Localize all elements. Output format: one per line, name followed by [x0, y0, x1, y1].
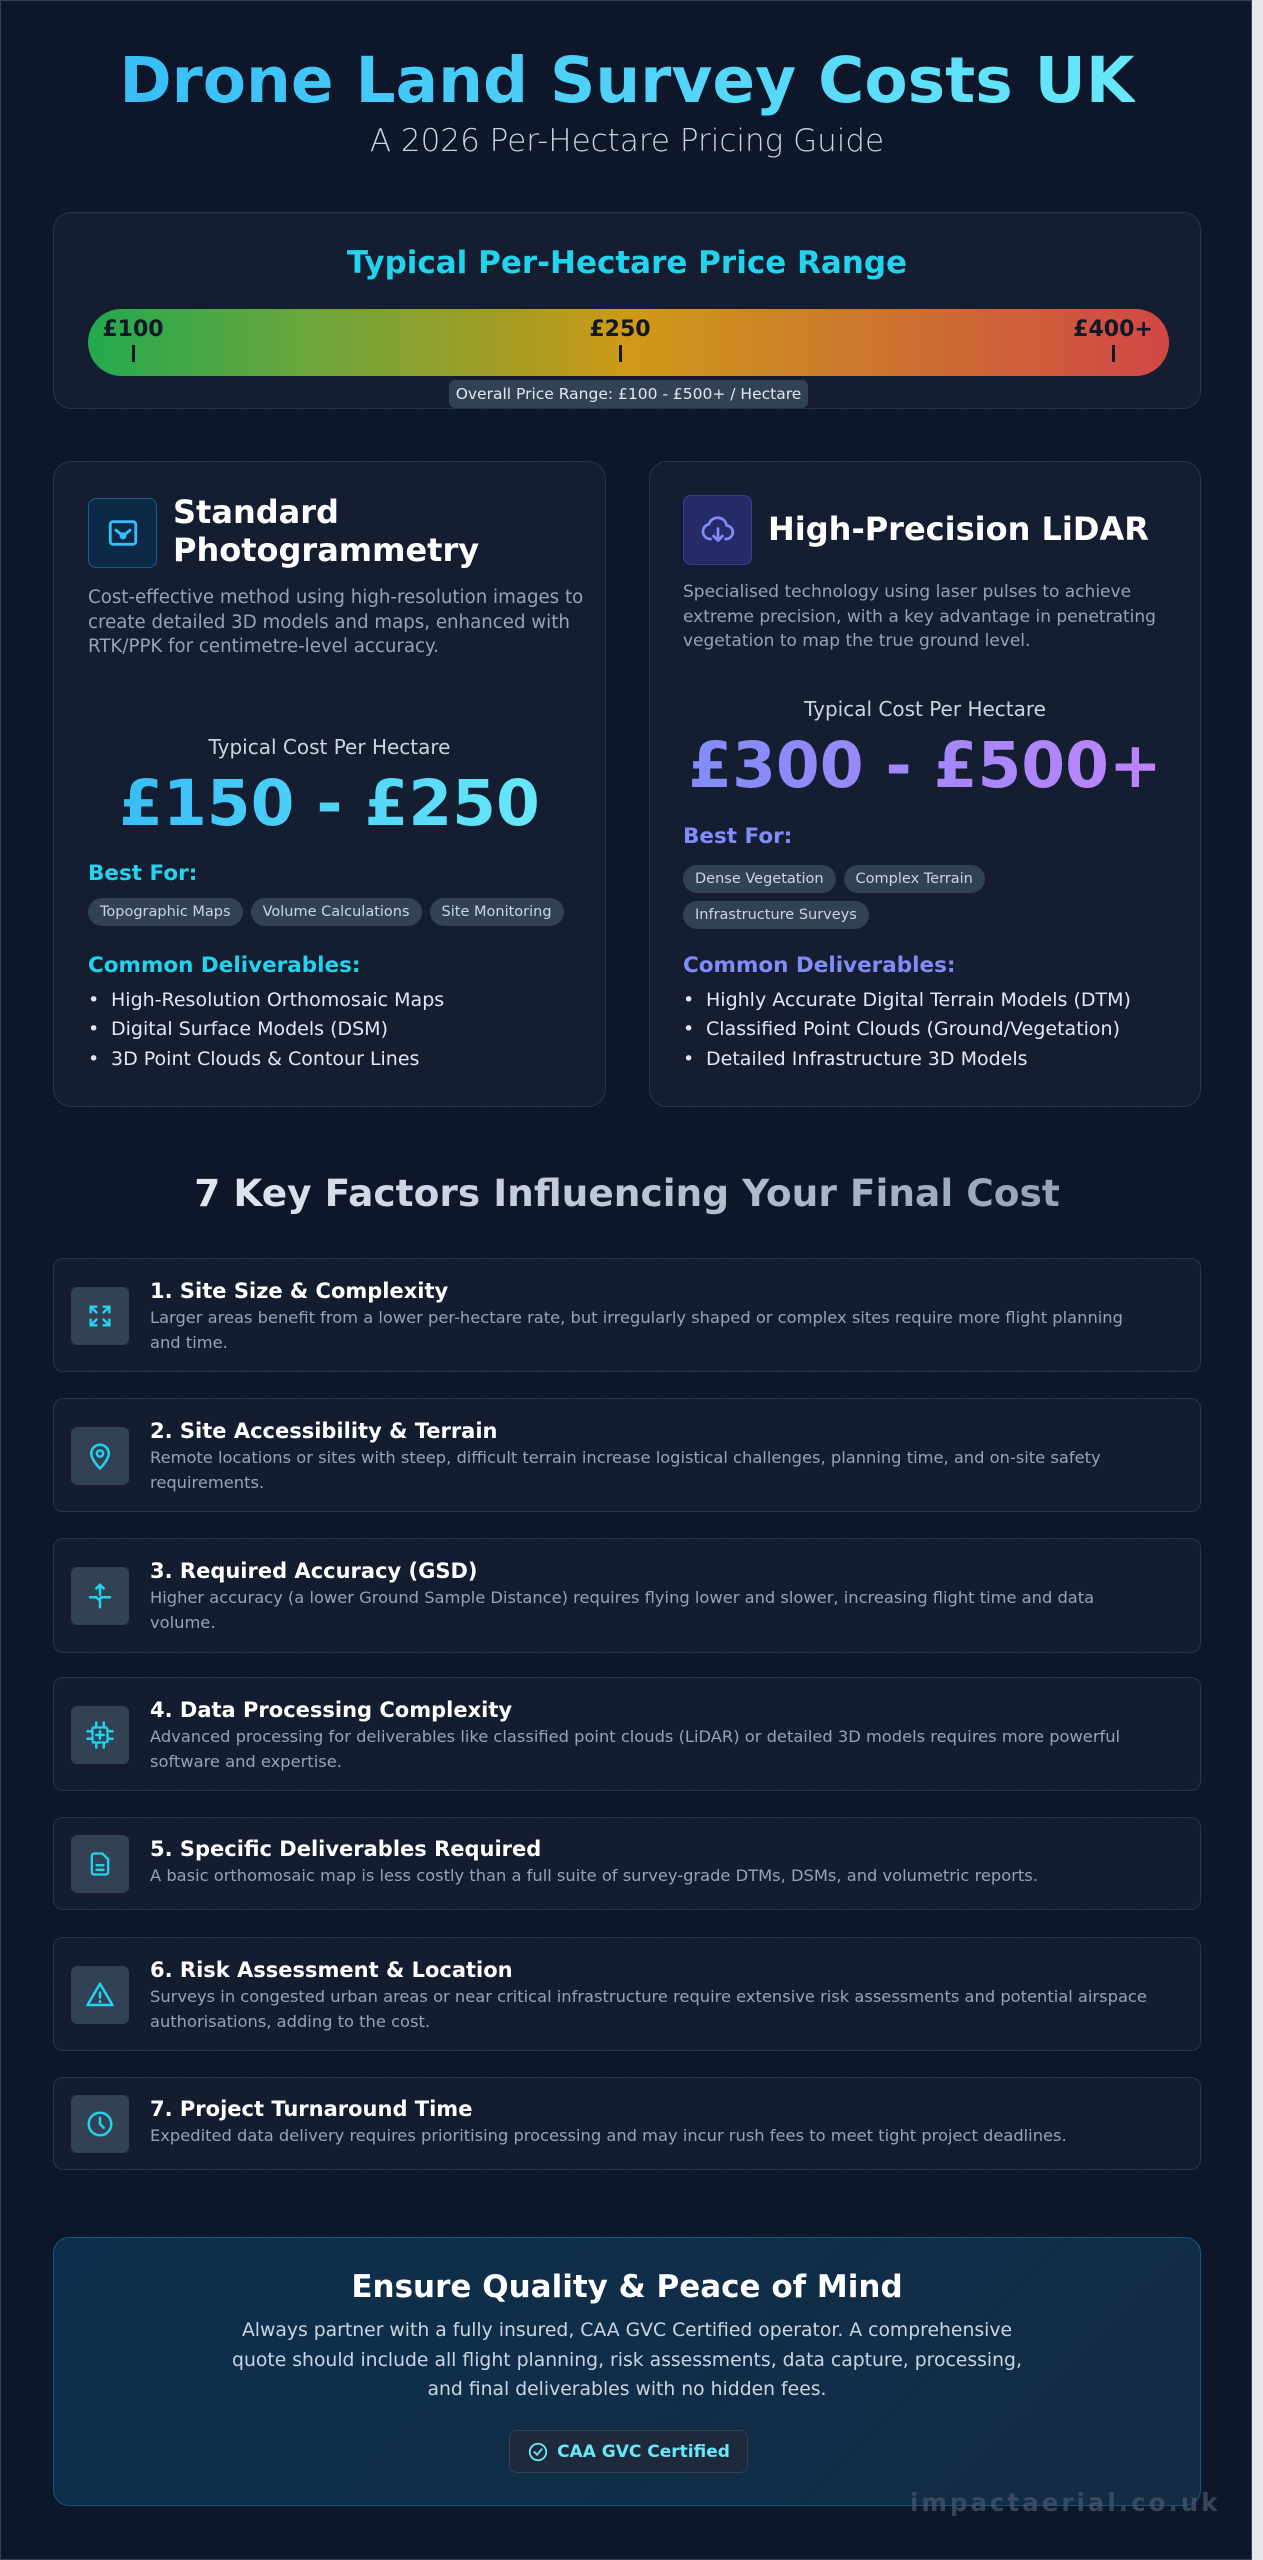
best for: Best For:	[88, 861, 197, 886]
panel: price range	[53, 212, 1201, 409]
factor 6	[53, 1937, 1201, 2051]
factor 2	[53, 1398, 1201, 1512]
heading: photogrammetry: Standard	[173, 493, 339, 531]
label £100	[102, 317, 164, 362]
icon: processor	[71, 1706, 129, 1764]
cost label: Typical Cost Per Hectare	[804, 697, 1046, 721]
factor 5: A basic orthomosaic map is less costly than a full suite of survey-grade DTMs, DSMs, and volumetric reports.	[150, 1866, 1038, 1885]
cost label: Typical Cost Per Hectare	[209, 735, 450, 759]
factor 1: Larger areas benefit from a lower per-hectare rate, but irregularly shaped or complex sites require more flight planning and time.	[150, 1308, 1123, 1352]
factor 7: 7. Project Turnaround Time	[150, 2097, 472, 2121]
title: Drone Land Survey Costs UK	[119, 44, 1135, 117]
heading: price range: Typical Per-Hectare Price Range	[347, 245, 907, 281]
deliverables heading: Common Deliverables:	[683, 953, 956, 978]
factor 6: Surveys in congested urban areas or near critical infrastructure require extensive risk assessments and potential airspace authorisations, adding to the cost.	[150, 1987, 1147, 2030]
panel: standard photogrammetry	[53, 461, 606, 1107]
factor 5: 5. Specific Deliverables Required	[150, 1837, 541, 1861]
description: Cost-effective method using high-resolution images to create detailed 3D models and maps, enhanced with RTK/PPK for centimetre-level accuracy.	[88, 587, 583, 657]
best for: Best For:	[683, 824, 792, 849]
description: Specialised technology using laser pulses to achieve extreme precision, with a key advantage in penetrating vegetation to map the true ground level.	[683, 582, 1156, 651]
deliverables heading: Common Deliverables:	[88, 953, 361, 978]
icon: document	[71, 1835, 129, 1893]
label £250: £250	[589, 317, 651, 342]
tags: Topographic Maps	[100, 904, 231, 920]
price: £300 - £500+	[688, 729, 1162, 802]
subtitle: A 2026 Per-Hectare Pricing Guide	[370, 123, 884, 159]
icon: location pin	[71, 1427, 129, 1485]
deliverables list: High-Resolution Orthomosaic Maps	[111, 989, 444, 1011]
overall range pill	[449, 380, 808, 408]
deliverables list: Digital Surface Models (DSM)	[111, 1018, 388, 1040]
heading: photogrammetry: Photogrammetry	[173, 531, 479, 569]
icon: expand	[71, 1287, 129, 1345]
factor 6: 6. Risk Assessment & Location	[150, 1958, 513, 1982]
deliverables list: Detailed Infrastructure 3D Models	[706, 1048, 1028, 1070]
factor 4: Advanced processing for deliverables like classified point clouds (LiDAR) or detailed 3D models requires more powerful software and expertise.	[150, 1727, 1120, 1770]
tags: Infrastructure Surveys	[695, 907, 857, 923]
deliverables list: 3D Point Clouds & Contour Lines	[111, 1048, 419, 1070]
factor 7	[53, 2077, 1201, 2170]
factor 2: 2. Site Accessibility & Terrain	[150, 1419, 498, 1443]
factor 1	[53, 1258, 1201, 1372]
factor 3	[53, 1538, 1201, 1653]
tags	[683, 865, 985, 929]
icon: photo envelope	[88, 498, 157, 568]
tags	[88, 898, 564, 926]
icon: accuracy	[71, 1567, 129, 1625]
price: £150 - £250	[119, 767, 540, 840]
icon: cloud download	[683, 495, 752, 565]
panel: lidar	[649, 461, 1201, 1107]
watermark: impactaerial.co.uk	[910, 2488, 1220, 2517]
heading: photogrammetry	[173, 493, 479, 569]
label £250	[589, 317, 651, 362]
factor 3: 3. Required Accuracy (GSD)	[150, 1559, 478, 1583]
deliverables list: Classified Point Clouds (Ground/Vegetation)	[706, 1018, 1120, 1040]
gradient price bar	[88, 309, 1169, 376]
heading: lidar: High-Precision LiDAR	[768, 510, 1149, 548]
factor 3: Higher accuracy (a lower Ground Sample Distance) requires flying lower and slower, increasing flight time and data volume.	[150, 1588, 1094, 1632]
heading: 7 key factors: 7 Key Factors Influencing Your Final Cost	[194, 1171, 1060, 1215]
badge: CAA GVC Certified: CAA GVC Certified	[557, 2442, 730, 2462]
label £400+	[1073, 317, 1153, 362]
factor 5	[53, 1817, 1201, 1910]
factor 7: Expedited data delivery requires prioritising processing and may incur rush fees to meet tight project deadlines.	[150, 2126, 1067, 2145]
tags: Complex Terrain	[856, 871, 973, 887]
callout text: Always partner with a fully insured, CAA GVC Certified operator. A comprehensive quote should include all flight planning, risk assessments, data capture, processing, and final deliverables with no hidden fees.	[232, 2320, 1022, 2400]
factor 4: 4. Data Processing Complexity	[150, 1698, 512, 1722]
tags: Site Monitoring	[442, 904, 552, 920]
factor 2: Remote locations or sites with steep, difficult terrain increase logistical challenges, planning time, and on-site safety requirements.	[150, 1448, 1101, 1492]
deliverables list: Highly Accurate Digital Terrain Models (DTM)	[706, 989, 1131, 1011]
heading: ensure quality: Ensure Quality & Peace of Mind	[351, 2269, 903, 2305]
label £100: £100	[102, 317, 164, 342]
tags: Dense Vegetation	[695, 871, 824, 887]
panel: quality callout	[53, 2237, 1201, 2506]
icon: warning	[71, 1966, 129, 2024]
factor 1: 1. Site Size & Complexity	[150, 1279, 448, 1303]
overall range pill: Overall Price Range: £100 - £500+ / Hectare	[456, 385, 801, 403]
factor 4	[53, 1677, 1201, 1791]
badge: CAA GVC Certified	[509, 2430, 748, 2473]
deliverables list	[90, 989, 444, 1070]
tags: Volume Calculations	[263, 904, 410, 920]
label £400+: £400+	[1073, 317, 1153, 342]
icon: clock	[71, 2095, 129, 2153]
deliverables list	[686, 989, 1131, 1070]
